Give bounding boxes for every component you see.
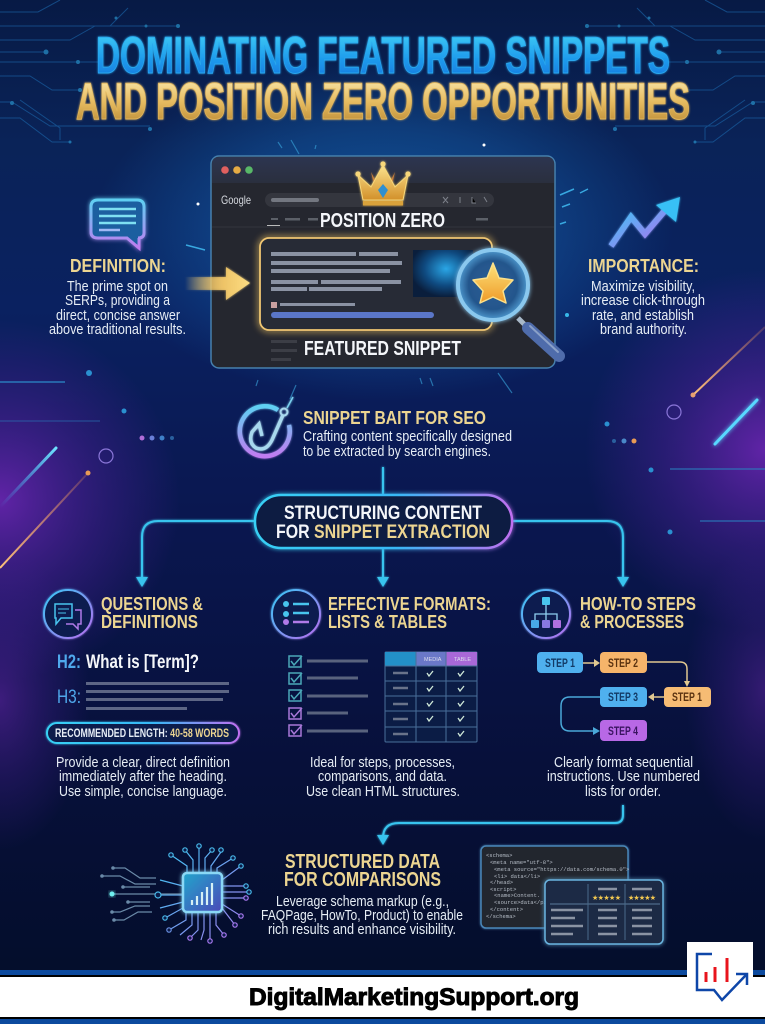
importance text: increase click-through [581, 293, 705, 309]
panel: how-to steps [522, 590, 711, 800]
step 4 purple [600, 720, 647, 741]
featured snippet box [260, 238, 492, 330]
code text: </schema> [486, 913, 516, 920]
definition text: The prime spot on [67, 279, 168, 295]
definition text: direct, concise answer [56, 308, 180, 324]
code text: <meta name="utf-8"> [490, 859, 553, 866]
icon: flow hierarchy [522, 590, 570, 638]
description: rich results and enhance visibility. [268, 922, 456, 938]
heading: & PROCESSES [580, 611, 684, 632]
code text: <script> [490, 886, 516, 893]
panel: definition [49, 200, 186, 338]
browser frame [211, 156, 555, 368]
code text: <li> data</li> [494, 873, 540, 880]
code text: </content> [490, 906, 523, 913]
icon: growth arrow [611, 197, 680, 246]
tabs [267, 218, 488, 226]
table column labels [424, 657, 471, 663]
pill line 2: FOR SNIPPET EXTRACTION [276, 521, 490, 543]
snippet link bar [271, 312, 434, 318]
description: Clearly format sequential [554, 755, 693, 771]
panel: structured data [100, 844, 663, 944]
code text: <source>data</p> [494, 899, 547, 906]
search bar [265, 193, 494, 207]
h3 example: H3: [57, 687, 81, 708]
snippet bait text [303, 429, 512, 460]
footer band [0, 970, 765, 1024]
comparison table [385, 652, 477, 742]
heading: FOR COMPARISONS [284, 869, 441, 891]
description: FAQPage, HowTo, Product) to enable [261, 908, 463, 924]
recommended length pill [47, 723, 239, 743]
icon: list [272, 590, 320, 638]
heading: HOW-TO STEPS [580, 593, 696, 614]
code text: </head> [490, 879, 513, 886]
faded lines [271, 340, 297, 361]
icon: circuit chip [100, 844, 251, 943]
description: immediately after the heading. [59, 769, 227, 785]
h2 example: H2: [57, 652, 81, 673]
code panel [481, 846, 629, 928]
panel: effective formats [272, 590, 491, 800]
snippet bait heading: SNIPPET BAIT FOR SEO [303, 407, 486, 428]
description [261, 894, 463, 938]
icon: hook [240, 397, 293, 456]
description [56, 755, 230, 800]
description: Use simple, concise language. [59, 784, 227, 800]
step 1 orange [664, 687, 711, 707]
star ratings [592, 894, 656, 902]
importance text: Maximize visibility, [591, 279, 695, 295]
panel: snippet bait [240, 397, 512, 460]
step 1 blue [537, 652, 583, 673]
icon: magnifying glass with star [458, 250, 559, 356]
code text [486, 852, 629, 920]
heading: QUESTIONS & [101, 593, 203, 614]
icon: crown [355, 161, 411, 206]
snippet bait text: to be extracted by search engines. [303, 444, 491, 460]
arrow: definition to snippet [185, 267, 250, 300]
step 4 purple: STEP 4 [608, 726, 638, 738]
logo [687, 942, 753, 1000]
panel: importance [581, 197, 705, 338]
star ratings: ★★★★★ [628, 894, 656, 902]
code text: <name>Content. [494, 892, 540, 899]
featured snippet label: FEATURED SNIPPET [304, 338, 461, 360]
step 3 blue: STEP 3 [608, 692, 638, 704]
step 2 orange [600, 652, 647, 673]
connectors from central pill [136, 467, 629, 587]
table column labels: MEDIA [424, 657, 442, 663]
importance heading: IMPORTANCE: [588, 255, 699, 276]
icon: chat bubble [91, 200, 144, 248]
description [306, 755, 460, 800]
heading [580, 593, 696, 632]
window controls [221, 166, 253, 174]
panel: questions and definitions [44, 590, 239, 800]
heading: EFFECTIVE FORMATS: [328, 593, 491, 614]
definition text [49, 279, 186, 338]
star ratings: ★★★★★ [592, 894, 621, 902]
definition heading: DEFINITION: [70, 255, 166, 276]
heading [284, 851, 441, 891]
pill line 1: STRUCTURING CONTENT [284, 502, 482, 524]
importance text: brand authority. [600, 322, 687, 338]
heading: DEFINITIONS [101, 611, 198, 632]
central pill [255, 495, 512, 548]
snippet text lines [271, 252, 402, 308]
definition text: SERPs, providing a [65, 293, 171, 309]
code text: <schema> [486, 852, 512, 859]
step 2 orange: STEP 2 [608, 658, 638, 670]
step 3 blue [600, 687, 647, 707]
snippet image [413, 250, 473, 297]
decorative streaks and particles [0, 140, 765, 568]
recommended length pill: RECOMMENDED LENGTH: 40-58 WORDS [55, 728, 229, 740]
title [76, 27, 690, 131]
heading: LISTS & TABLES [328, 611, 447, 632]
checklist [289, 656, 368, 736]
importance text [581, 279, 705, 338]
description: Provide a clear, direct definition [56, 755, 230, 771]
arrow: steps to structured data [377, 805, 623, 845]
panel: browser window [211, 156, 555, 368]
heading [101, 593, 203, 632]
description [547, 755, 700, 800]
step 1 blue: STEP 1 [545, 658, 575, 670]
description: Ideal for steps, processes, [310, 755, 455, 771]
heading [328, 593, 491, 632]
position zero label: POSITION ZERO [320, 210, 445, 232]
heading: STRUCTURED DATA [285, 851, 440, 873]
placeholder lines [86, 682, 229, 710]
description: Use clean HTML structures. [306, 784, 460, 800]
table column labels: TABLE [454, 657, 471, 663]
description: instructions. Use numbered [547, 769, 700, 785]
h2 term: What is [Term]? [86, 652, 199, 673]
circuit pattern: top right [585, 0, 765, 144]
rating table panel [545, 880, 663, 944]
circuit pattern: top left [0, 0, 180, 144]
description: comparisons, and data. [318, 769, 447, 785]
snippet bait text: Crafting content specifically designed [303, 429, 512, 445]
icon: chat bubbles [44, 590, 92, 638]
importance text: rate, and establish [592, 308, 694, 324]
code text: <meta source="https://data.com/schema.0"> [494, 866, 629, 873]
step flow connectors [561, 659, 690, 735]
google logo: Google [221, 193, 251, 207]
website name: DigitalMarketingSupport.org [249, 984, 579, 1011]
description: Leverage schema markup (e.g., [276, 894, 449, 910]
description: lists for order. [585, 784, 661, 800]
step 1 orange: STEP 1 [672, 692, 702, 704]
definition text: above traditional results. [49, 322, 186, 338]
